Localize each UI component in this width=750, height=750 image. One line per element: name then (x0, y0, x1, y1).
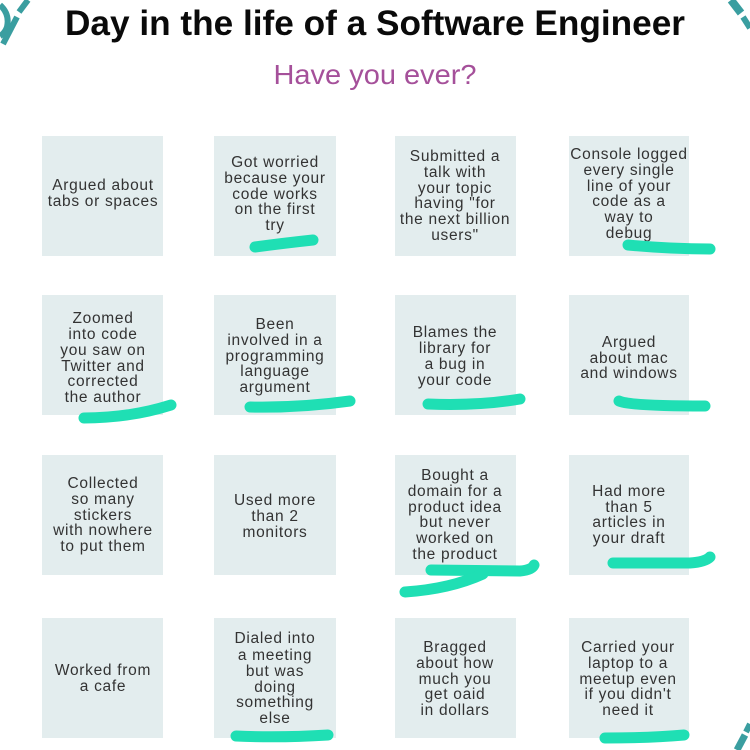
card: bought a domain: Bought a (421, 467, 489, 484)
card: tabs or spaces: tabs or spaces (48, 193, 158, 210)
card: zoomed into code: you saw on (60, 342, 146, 359)
card: blames the library: your code (418, 372, 492, 389)
card: console logged (569, 136, 710, 256)
card: dialed into a meeting: but was (246, 663, 304, 680)
card: next billion users talk (395, 136, 516, 256)
card: dialed into a meeting: else (259, 710, 291, 727)
card: programming language argument: language (240, 363, 310, 380)
card: zoomed into code: corrected (68, 373, 138, 390)
card: next billion users talk: the next billion (400, 211, 510, 228)
card: stickers (42, 455, 163, 575)
card: console logged: way to (604, 209, 654, 226)
card: carried laptop: if you didn't (584, 686, 672, 703)
card: zoomed into code: the author (65, 389, 141, 406)
card: dialed into a meeting: a meeting (238, 647, 312, 664)
card: code works first try: on the first (235, 201, 315, 218)
card: bought a domain: but never (420, 514, 490, 531)
decoration: top left corner (0, 0, 28, 44)
card: console logged: line of your (587, 178, 671, 195)
card: carried laptop (569, 618, 689, 738)
card: worked from a cafe: a cafe (80, 678, 126, 695)
card: dialed into a meeting (214, 618, 336, 738)
card: stickers: Collected (68, 475, 138, 492)
card: mac and windows: Argued (602, 334, 656, 351)
card: monitors: Used more (234, 492, 316, 509)
card: next billion users talk: having "for (414, 195, 496, 212)
card: code works first try: code works (232, 186, 318, 203)
card: blames the library: Blames the (413, 324, 497, 341)
card: stickers: so many (71, 491, 135, 508)
card: code works first try: Got worried (231, 154, 319, 171)
card: bought a domain: product idea (408, 499, 502, 516)
card: next billion users talk: Submitted a (410, 148, 500, 165)
card: articles in draft: articles in (592, 514, 666, 531)
card: console logged: code as a (592, 193, 666, 210)
card: next billion users talk: users" (431, 227, 479, 244)
card: stickers: with nowhere (52, 522, 153, 539)
card: bragged about pay: Bragged (423, 639, 487, 656)
card: carried laptop: Carried your (581, 639, 675, 656)
card: zoomed into code (42, 295, 171, 418)
card: next billion users talk: your topic (418, 180, 492, 197)
card: zoomed into code: Twitter and (61, 358, 145, 375)
card: console logged: Console logged (570, 146, 688, 163)
card: articles in draft: Had more (592, 483, 666, 500)
card: worked from a cafe: Worked from (55, 662, 151, 679)
card: bragged about pay: get oaid (425, 686, 485, 703)
card: code works first try (214, 136, 336, 256)
card: programming language argument: programming (225, 348, 325, 365)
card: dialed into a meeting: something (236, 694, 314, 711)
card: monitors: monitors (242, 524, 308, 541)
decoration: bottom right corner (737, 724, 750, 750)
card: articles in draft (569, 455, 710, 575)
card: code works first try: try (265, 217, 285, 234)
card: carried laptop: meetup even (579, 671, 677, 688)
card: articles in draft: than 5 (605, 499, 653, 516)
card: programming language argument: Been (256, 316, 294, 333)
card: bought a domain: worked on (415, 530, 494, 547)
card: programming language argument: involved in a (227, 332, 323, 349)
card: blames the library: library for (419, 340, 491, 357)
card: carried laptop: need it (602, 702, 654, 719)
card: zoomed into code: Zoomed (72, 310, 134, 327)
card: mac and windows: about mac (590, 350, 668, 367)
card: articles in draft: your draft (593, 530, 665, 547)
card: monitors: than 2 (251, 508, 299, 525)
card: bragged about pay: about how (416, 655, 494, 672)
card: console logged: debug (606, 225, 652, 242)
card: bragged about pay: much you (419, 671, 491, 688)
card: programming language argument (214, 295, 350, 415)
card: bought a domain (395, 455, 534, 592)
card: mac and windows (569, 295, 705, 415)
card: bought a domain: domain for a (408, 483, 502, 500)
card: tabs or spaces: Argued about (52, 177, 154, 194)
card: mac and windows: and windows (580, 365, 678, 382)
title: Day in the life of a Software Engineer (65, 4, 685, 43)
card: next billion users talk: talk with (424, 164, 486, 181)
card: tabs or spaces (42, 136, 163, 256)
card: code works first try: because your (224, 170, 326, 187)
card: bought a domain: the product (412, 546, 498, 563)
card: console logged: every single (583, 162, 675, 179)
card: stickers: stickers (74, 507, 132, 524)
card: blames the library (395, 295, 520, 415)
card: carried laptop: laptop to a (588, 655, 668, 672)
card: zoomed into code: into code (68, 326, 138, 343)
card: worked from a cafe (42, 618, 163, 738)
card: blames the library: a bug in (425, 356, 485, 373)
card: dialed into a meeting: doing (254, 679, 296, 696)
card: bragged about pay (395, 618, 516, 738)
decoration: top right corner (731, 0, 750, 28)
card: monitors (214, 455, 336, 575)
subtitle: Have you ever? (274, 59, 476, 90)
card: bragged about pay: in dollars (420, 702, 490, 719)
card: dialed into a meeting: Dialed into (235, 630, 315, 647)
card: stickers: to put them (60, 538, 146, 555)
card: programming language argument: argument (239, 379, 311, 396)
